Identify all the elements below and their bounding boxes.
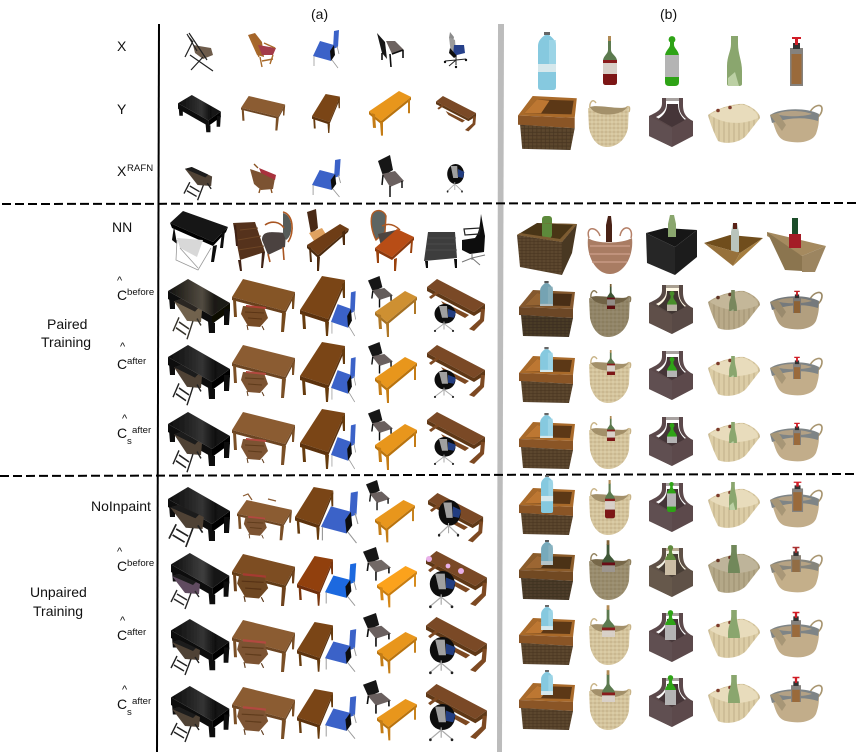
result 1	[519, 413, 575, 469]
vertical axis line	[157, 24, 159, 752]
result 4	[368, 409, 417, 470]
result 3	[300, 409, 356, 469]
label: C before unpaired	[117, 546, 154, 574]
row NN: nearest neighbour pairs	[170, 209, 485, 271]
result 2	[589, 605, 631, 665]
label: X RAFN: RAFN	[127, 163, 153, 174]
result 2	[232, 554, 295, 606]
result 5	[427, 279, 485, 332]
label: Y: Y	[117, 101, 127, 117]
NN pair 2: pink basket and dark bottle	[588, 216, 632, 274]
result 2	[232, 345, 295, 398]
result 1	[171, 619, 229, 675]
label: Cs after paired: after	[132, 425, 152, 436]
label: C after unpaired	[117, 615, 147, 643]
label: C before paired: before	[127, 287, 154, 298]
label: C after unpaired: C	[117, 627, 127, 643]
label: C after paired	[117, 341, 147, 372]
result 5	[770, 482, 822, 527]
result 2	[589, 284, 631, 337]
row X: bottles	[538, 32, 803, 90]
NN pair 4: tan tray and white bottle	[704, 223, 763, 266]
result 2	[232, 687, 295, 739]
result 4	[708, 290, 760, 330]
row C before (paired)	[519, 281, 822, 337]
result 1	[168, 279, 230, 339]
result 1	[519, 281, 575, 337]
row C before (paired)	[168, 276, 485, 339]
row Cs after (paired)	[168, 409, 485, 472]
result 1	[519, 475, 575, 535]
result 3	[649, 482, 693, 532]
group label: Paired Training	[41, 316, 91, 350]
result 3	[300, 276, 356, 336]
label: C after unpaired: ^	[120, 615, 126, 627]
NN pair 1: wicker box and green bottle	[517, 216, 577, 275]
row NoInpaint	[168, 480, 483, 547]
result 1	[168, 487, 230, 547]
result 4	[368, 342, 417, 403]
result 1	[519, 670, 575, 730]
label: C before unpaired: ^	[117, 546, 123, 558]
row Cs after (unpaired)	[171, 680, 487, 742]
label: C before paired: C	[117, 287, 127, 303]
group label: Unpaired Training: Training	[33, 603, 83, 619]
result 4	[708, 482, 760, 528]
group label: Paired Training: Training	[41, 334, 91, 350]
result 3	[649, 545, 693, 597]
label: X RAFN: X	[117, 163, 127, 179]
result 2	[232, 279, 295, 332]
result 4	[363, 547, 417, 607]
NN pair 2: slatted table and grey armchair	[233, 212, 292, 271]
result 4	[366, 480, 415, 542]
result 5	[426, 551, 487, 608]
label: Cs after unpaired: s	[127, 707, 132, 718]
label: C before paired: ^	[117, 275, 123, 287]
group label: Paired Training: Paired	[47, 316, 87, 332]
result 3	[649, 610, 693, 662]
result 5	[770, 612, 822, 657]
result 3	[649, 417, 693, 466]
row C before (unpaired)	[519, 540, 822, 600]
result 5	[426, 684, 487, 741]
panel (b): bottles and baskets	[517, 32, 826, 730]
label: C after paired: ^	[120, 341, 126, 353]
result 3	[297, 622, 356, 672]
label: C after paired: after	[127, 356, 147, 367]
group label: Unpaired Training	[30, 584, 87, 619]
row Y: tables	[178, 91, 476, 136]
panel (b) heading: (b)	[660, 6, 677, 22]
panel (a): chairs and tables	[168, 30, 487, 742]
row C after (paired)	[519, 347, 822, 403]
label: Cs after paired: s	[127, 436, 132, 447]
result 2	[589, 670, 631, 730]
result 5	[770, 291, 822, 329]
result 5	[770, 547, 822, 592]
label: Cs after unpaired: ^	[122, 684, 128, 696]
result 4	[363, 613, 417, 673]
result 5	[428, 493, 483, 542]
NN pair 3: wooden chair and long table	[307, 209, 349, 271]
result 3	[297, 556, 356, 606]
result 4	[708, 545, 760, 593]
label: C before paired	[117, 275, 154, 303]
result 4	[708, 422, 760, 462]
row NoInpaint	[519, 475, 822, 535]
result 5	[770, 357, 822, 395]
result 1	[171, 553, 229, 609]
group label: Unpaired Training: Unpaired	[30, 584, 87, 600]
result 1	[168, 345, 230, 405]
row labels	[30, 38, 154, 718]
row C after (unpaired)	[519, 605, 822, 665]
row Y: baskets	[518, 96, 822, 150]
row X RAFN: rotated chairs	[184, 155, 464, 200]
result 1	[519, 605, 575, 665]
label: NN: NN	[112, 219, 132, 235]
result 1	[519, 540, 575, 600]
result 1	[519, 347, 575, 403]
row NN: nearest neighbour pairs	[517, 215, 826, 275]
row Cs after (paired)	[519, 413, 822, 469]
dashed separator: inputs and paired	[2, 203, 856, 204]
dashed separator: paired and unpaired	[0, 474, 856, 476]
label: Cs after paired: ^	[122, 413, 128, 425]
row X: chairs	[185, 30, 467, 71]
result 5	[427, 412, 485, 465]
label: C after unpaired: after	[127, 627, 147, 638]
row Cs after (unpaired)	[519, 670, 822, 730]
result 4	[368, 276, 417, 337]
row C before (unpaired)	[171, 547, 487, 609]
result 1	[171, 686, 229, 742]
panel (a) heading: (a)	[311, 6, 328, 22]
label: C before unpaired: before	[127, 558, 154, 569]
label: Cs after paired: C	[117, 425, 127, 441]
NN pair 1: black table and white chair	[170, 211, 228, 270]
label: X RAFN	[117, 163, 153, 179]
result 3	[649, 675, 693, 727]
NN pair 3: black box and sage bottle	[646, 215, 697, 275]
result 3	[297, 689, 356, 739]
result 5	[770, 677, 822, 722]
label: C after paired: C	[117, 356, 127, 372]
label: Cs after unpaired: C	[117, 696, 127, 712]
label: Cs after paired	[117, 413, 152, 447]
NN pair 5: dark table and black office chair	[424, 214, 485, 268]
result 5	[770, 423, 822, 461]
result 2	[589, 416, 631, 469]
result 5	[426, 617, 487, 674]
result 2	[237, 494, 292, 540]
result 4	[708, 356, 760, 396]
label: Cs after unpaired	[117, 684, 152, 718]
result 2	[589, 480, 631, 535]
result 4	[363, 680, 417, 740]
result 3	[300, 342, 356, 402]
row C after (unpaired)	[171, 613, 487, 675]
result 3	[295, 487, 358, 543]
result 5	[427, 345, 485, 398]
result 2	[589, 350, 631, 403]
grey divider between panels	[497, 24, 504, 752]
label: Cs after unpaired: after	[132, 696, 152, 707]
result 4	[708, 675, 760, 723]
result 1	[168, 412, 230, 472]
result 3	[649, 285, 693, 334]
result 2	[232, 412, 295, 465]
row C after (paired)	[168, 342, 485, 405]
NN pair 4: armchair and orange table	[371, 211, 414, 271]
label: C before unpaired: C	[117, 558, 127, 574]
result 2	[232, 620, 295, 672]
NN pair 5: wide tray and red bottle	[767, 218, 826, 272]
result 4	[708, 610, 760, 658]
label: X: X	[117, 38, 127, 54]
result 2	[589, 540, 631, 600]
label: NoInpaint: NoInpaint	[91, 498, 151, 514]
result 3	[649, 351, 693, 400]
